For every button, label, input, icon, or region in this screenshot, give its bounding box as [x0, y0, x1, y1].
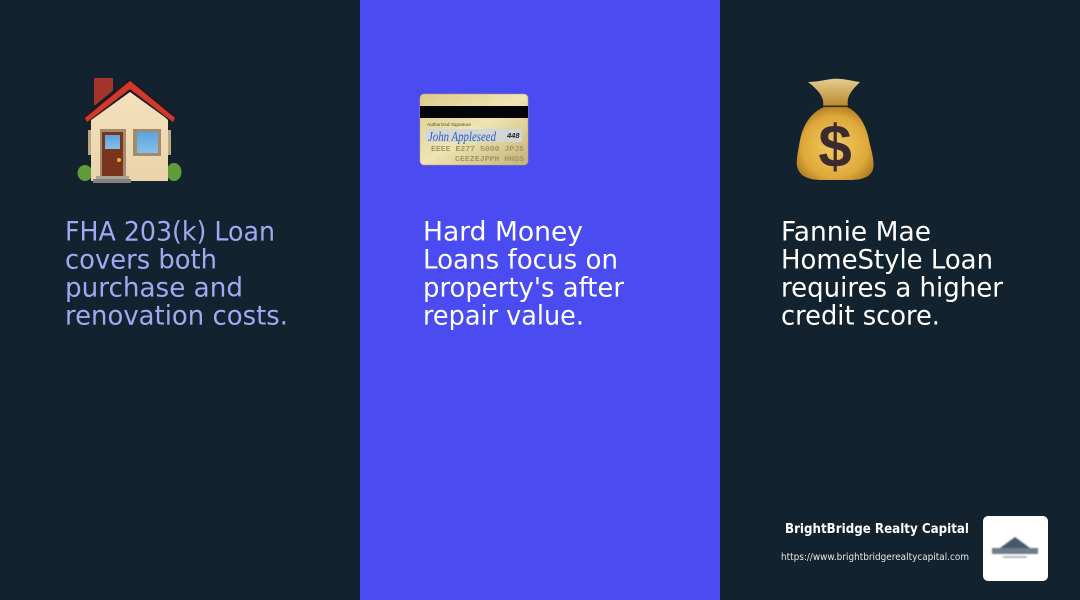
icon: money bag: $ — [818, 113, 852, 180]
text block: Hard Money Loans: Loans focus on — [423, 244, 618, 276]
icon: house — [78, 77, 182, 183]
icon: credit card: Authorized Signature — [427, 122, 472, 127]
text block: FHA 203(k) Loan — [65, 216, 288, 332]
panel: right background — [720, 0, 1080, 600]
panel: middle background — [360, 0, 720, 600]
text block: Hard Money Loans: property's after — [423, 272, 624, 304]
text block: Fannie Mae HomeStyle: credit score. — [781, 300, 940, 332]
text block: Fannie Mae HomeStyle: HomeStyle Loan — [781, 244, 993, 276]
text block: Fannie Mae HomeStyle: requires a higher — [781, 272, 1003, 304]
text block: FHA 203(k) Loan: renovation costs. — [65, 300, 288, 332]
icon: credit card: EEEE E277 5000 JPJ5 — [431, 146, 525, 154]
text block: FHA 203(k) Loan: covers both — [65, 244, 217, 276]
icon: credit card: 448 — [506, 131, 520, 140]
panel: left background — [0, 0, 360, 600]
text block: Hard Money Loans: Hard Money — [423, 216, 583, 248]
icon: credit card: CEEZEJPPH HHOS — [455, 156, 525, 164]
icon: credit card: John Appleseed — [428, 130, 497, 145]
text block: Fannie Mae HomeStyle: Fannie Mae — [781, 216, 931, 248]
text block: FHA 203(k) Loan: FHA 203(k) Loan — [65, 216, 275, 248]
text block: Fannie Mae HomeStyle — [781, 216, 1003, 332]
text block: FHA 203(k) Loan: purchase and — [65, 272, 243, 304]
footer: website url: https://www.brightbridgerealtycapital.com — [781, 552, 969, 563]
footer: brand name: BrightBridge Realty Capital — [785, 522, 969, 537]
icon: money bag — [797, 79, 874, 180]
icon: credit card — [420, 94, 528, 165]
text block: Hard Money Loans: repair value. — [423, 300, 584, 332]
footer: logo — [983, 516, 1048, 581]
text block: Hard Money Loans — [423, 216, 624, 332]
